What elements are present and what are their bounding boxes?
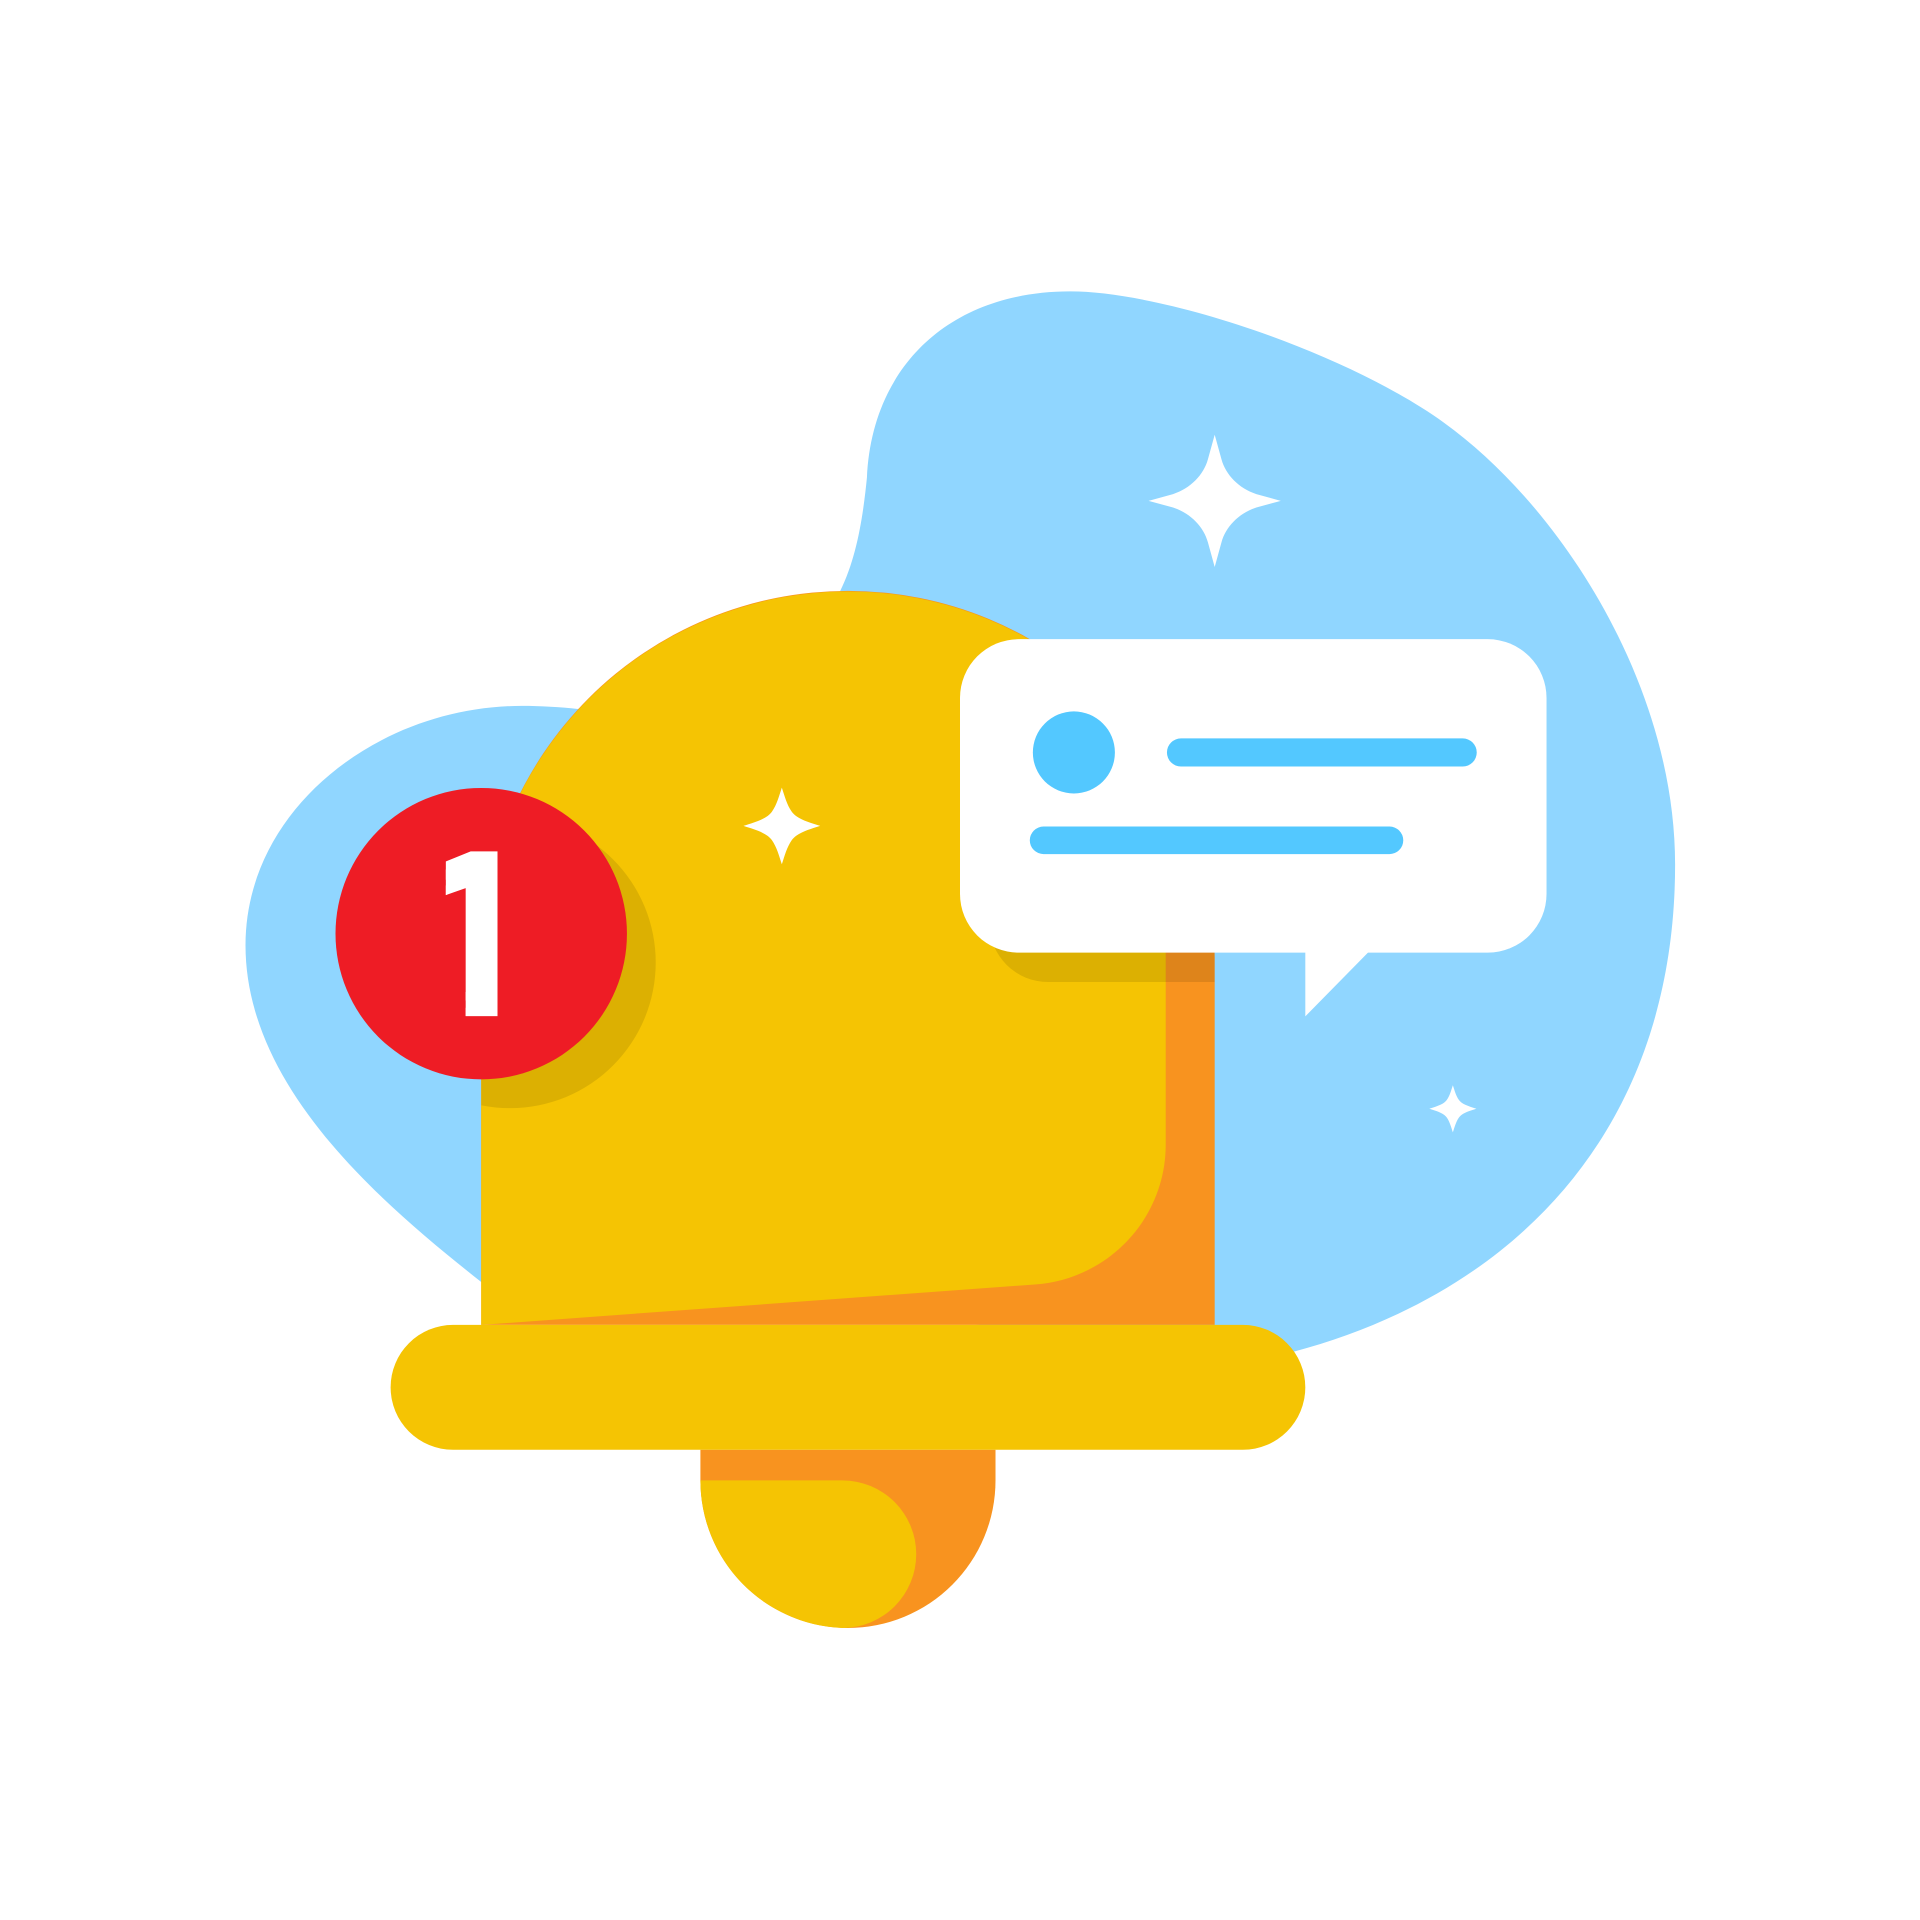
illustration: notification bell [246,291,1676,1628]
badge number: 1 [415,800,548,1067]
bubble body [960,639,1547,953]
bell body shaded side [481,591,1215,1325]
icon: small sparkle [1429,1085,1476,1132]
icon: medium sparkle on bell [743,788,820,864]
badge circle [336,788,627,1079]
bell [364,591,1576,1628]
background blob [246,291,1675,1352]
avatar dot [1033,711,1115,793]
message line two [1030,827,1403,854]
notification badge [336,788,627,1079]
icon: large sparkle [1149,435,1281,567]
bubble tail [1305,943,1378,1016]
speech bubble shadow [994,948,1214,982]
badge shadow [482,846,656,1108]
bell rim [391,1325,1305,1450]
message line one [1167,738,1477,767]
bell clapper [700,1450,996,1628]
bell body highlight [481,591,1166,1325]
speech bubble [960,639,1547,1016]
